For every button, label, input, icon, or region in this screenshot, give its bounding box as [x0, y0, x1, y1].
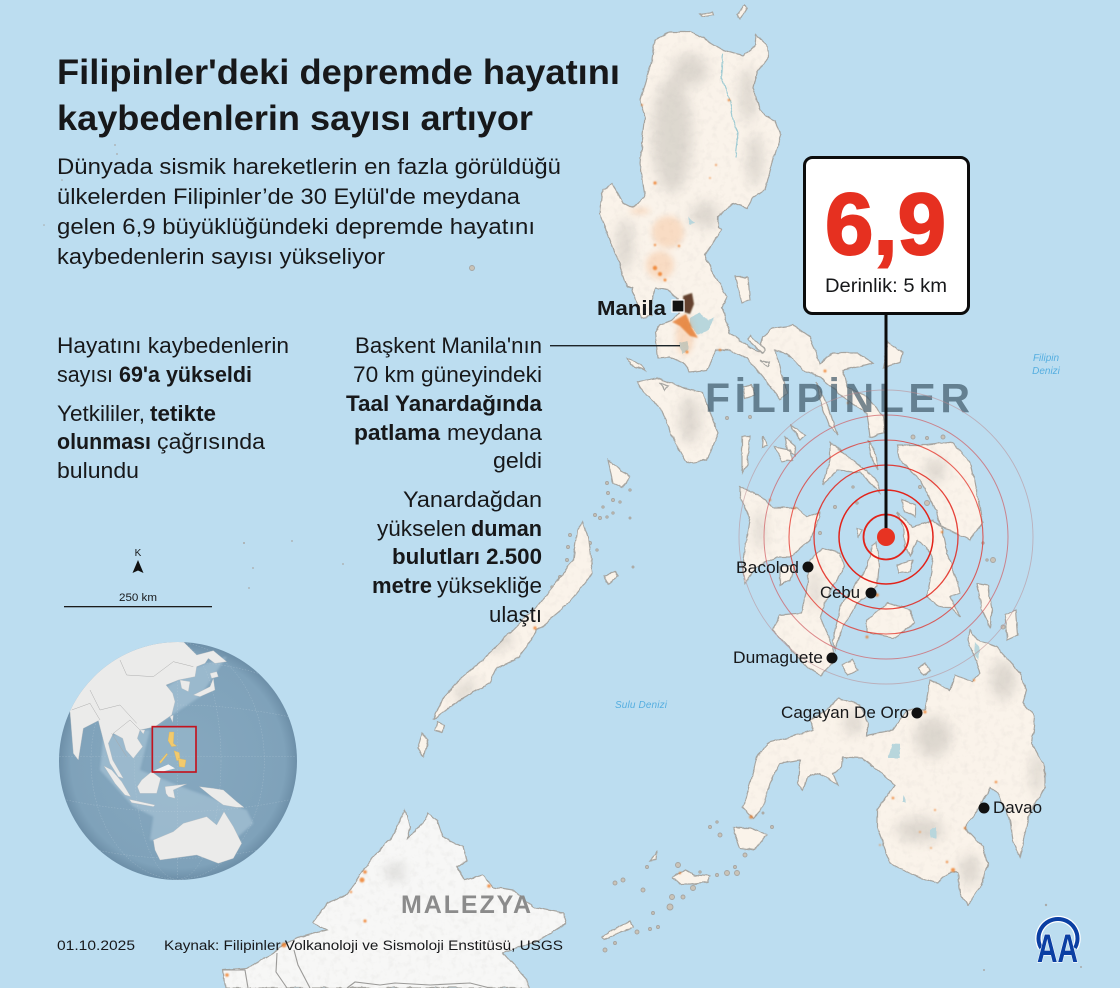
city: Dumaguete: Dumaguete [733, 649, 823, 667]
text block: officials: tetikte [150, 401, 216, 426]
intro text: kaybedenlerin sayısı yükseliyor [57, 244, 386, 269]
text block: officials: Yetkililer, [57, 401, 145, 426]
text block: smoke clouds [372, 487, 542, 627]
country borders [72, 660, 193, 757]
map: land masses [222, 4, 1046, 988]
city: Cagayan De Oro: Cagayan De Oro [781, 704, 909, 722]
label: Filipin Denizi sea: Filipin [1033, 353, 1059, 364]
earthquake rings [739, 390, 1033, 684]
title: kaybedenlerin sayısı artıyor [57, 99, 533, 138]
text block: Taal volcano: 70 km güneyindeki [353, 362, 542, 387]
text block: smoke clouds: Yanardağdan [403, 487, 542, 512]
Taal leader line [550, 345, 680, 346]
distant reefs [43, 144, 1082, 971]
intro text: gelen 6,9 büyüklüğündeki depremde hayatını [57, 214, 535, 239]
label: Filipin Denizi sea: Denizi [1032, 366, 1061, 377]
intro text: ülkelerden Filipinler’de 30 Eylül'de meydana [57, 184, 521, 209]
text block: death toll: Hayatını kaybedenlerin [57, 333, 289, 358]
intro text: Dünyada sismik hareketlerin en fazla görüldüğü [57, 154, 561, 179]
city: Cebu: Cebu [820, 584, 860, 602]
small islets scattered around the archipelago [470, 266, 1005, 952]
terrain relief [382, 50, 1044, 923]
graticule [59, 643, 296, 879]
depth: Derinlik: 5 km [825, 275, 947, 297]
text block: Taal volcano: meydana [447, 420, 543, 445]
text block: Taal volcano: Taal Yanardağında [346, 391, 543, 416]
logo: AA [1037, 919, 1078, 971]
text block: smoke clouds: yüksekliğe [437, 573, 542, 598]
magnitude value: 6,9 [825, 176, 946, 273]
text block: Taal volcano: patlama [354, 420, 441, 445]
city: Davao: Davao [993, 799, 1042, 817]
text block: officials: çağrısında [157, 429, 266, 454]
lakes and rivers [679, 53, 980, 838]
logo: AA: AA [1037, 927, 1078, 971]
text block: death toll: 69'a yükseldi [119, 362, 252, 387]
land: Malaysia Borneo [223, 810, 567, 988]
source: Kaynak: Filipinler Volkanoloji ve Sismoloji Enstitüsü, USGS [164, 938, 563, 953]
text block: officials [57, 401, 266, 483]
text block: smoke clouds: bulutları 2.500 [392, 544, 542, 569]
city: Bacolod: Bacolod [736, 559, 799, 577]
text block: death toll [57, 333, 289, 387]
title: Filipinler'deki depremde hayatını [57, 53, 620, 92]
date: 01.10.2025 [57, 938, 135, 953]
scale bar: 250 km [119, 592, 157, 604]
population density spots [225, 99, 997, 977]
locator box [152, 727, 196, 772]
callout stem [884, 312, 888, 537]
country label: Malezya: MALEZYA [401, 891, 531, 919]
Brunei and Sabah borders [223, 950, 490, 988]
country label: Filipinler: FİLİPİNLER [705, 375, 970, 421]
land: Philippine islands [418, 5, 1045, 940]
text block: Taal volcano [346, 333, 543, 473]
epicentre dot [877, 528, 895, 546]
locator globe [59, 642, 297, 880]
text block: smoke clouds: yükselen [377, 516, 466, 541]
text block: smoke clouds: metre [372, 573, 432, 598]
title [57, 53, 620, 138]
continental shelf [100, 657, 253, 847]
label: Filipin Denizi sea [1032, 353, 1061, 377]
city: Manila: Manila [597, 298, 667, 320]
continents [70, 642, 244, 864]
callout: magnitude [804, 158, 968, 314]
text block: officials: bulundu [57, 458, 139, 483]
text block: smoke clouds: ulaştı [489, 602, 542, 627]
Malaysia on locator [154, 764, 175, 771]
north arrow [132, 548, 144, 573]
intro text [57, 154, 561, 269]
text block: Taal volcano: Başkent Manila'nın [355, 333, 542, 358]
text block: Taal volcano: geldi [493, 448, 542, 473]
text block: officials: olunması [57, 429, 151, 454]
text block: death toll: sayısı [57, 362, 113, 387]
text block: smoke clouds: duman [471, 516, 542, 541]
north arrow: K [135, 548, 142, 559]
city: Cebu [820, 584, 876, 602]
label: Sulu Denizi sea: Sulu Denizi [615, 700, 668, 711]
locator box fill [152, 727, 196, 772]
Philippines on locator [159, 732, 186, 767]
